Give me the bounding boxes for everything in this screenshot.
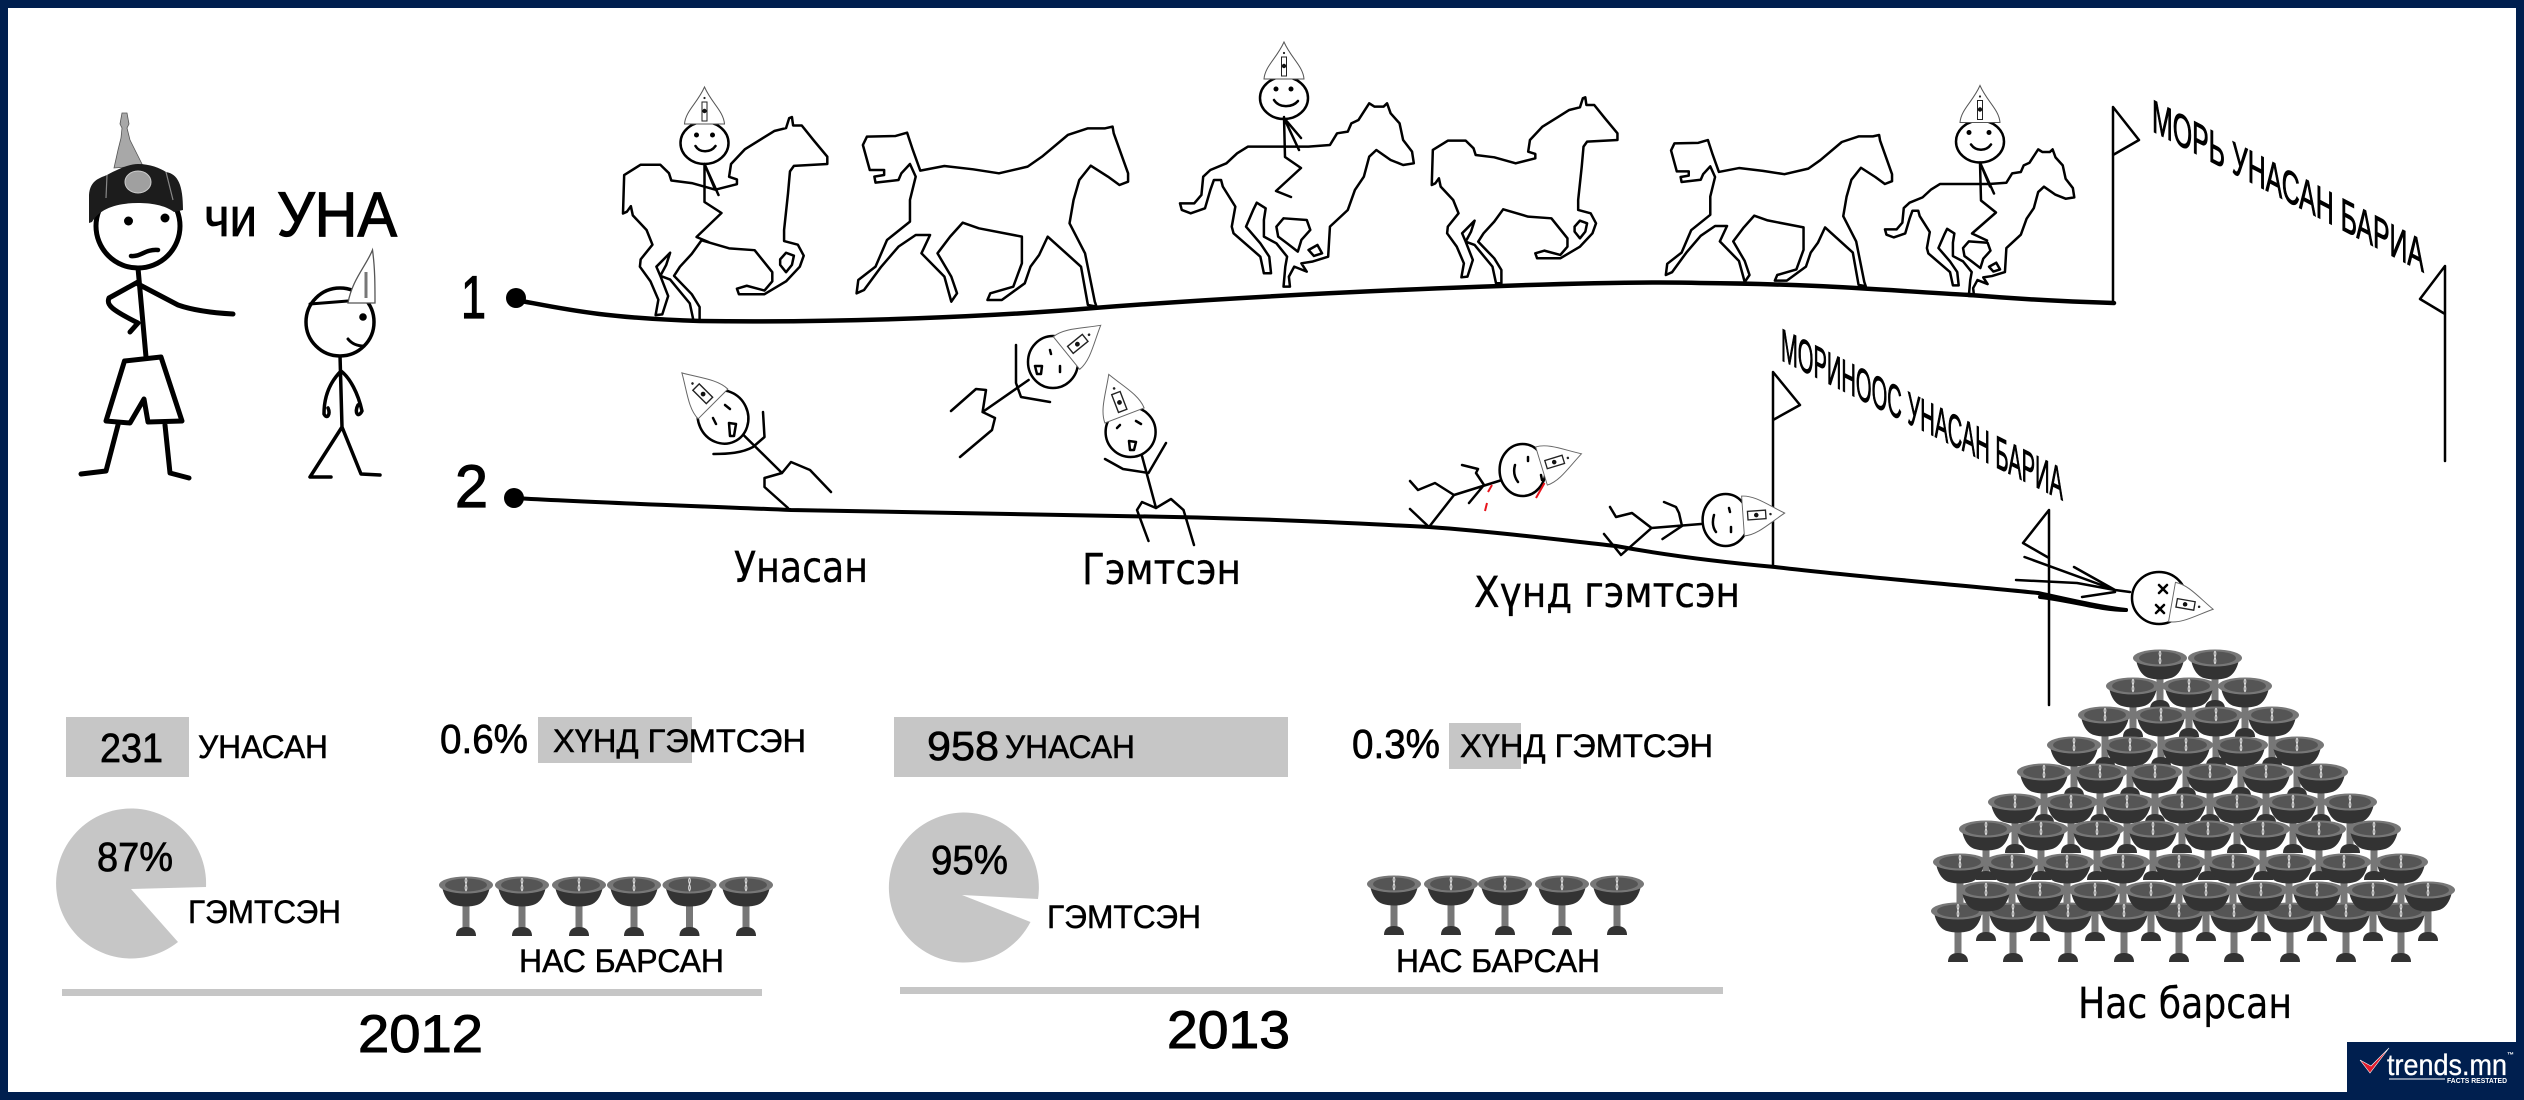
horse 4: [1432, 97, 1617, 283]
horse 5: [1666, 135, 1892, 286]
finish flag 2 right: [2023, 510, 2049, 705]
2012 deaths: six cups: [439, 876, 773, 936]
logo: trends.mn: ™: [2507, 1052, 2514, 1059]
2013 fell label: УНАСАН: [1005, 729, 1135, 765]
finish flag 1 left: [2113, 107, 2139, 303]
falling rider in the air: [951, 309, 1114, 457]
text: МОРИНООС УНАСАН БАРИА: [1781, 319, 2063, 511]
2012 injured pie: [56, 808, 206, 958]
heading: чи УНА: УНА: [277, 180, 397, 250]
logo: trends.mn: FACTS RESTATED: [2447, 1076, 2508, 1085]
finish flag 2 left: [1773, 372, 1800, 566]
horse 2: [857, 127, 1128, 307]
label: Нас барсан: Нас барсан: [2078, 979, 2292, 1029]
heading: чи УНА: [204, 180, 397, 250]
big stick man with hat: [81, 113, 233, 478]
2013 fell bar: [894, 717, 1288, 777]
2012 deaths label: НАС БАРСАН: [519, 943, 724, 979]
2012 severe injury label: ХҮНД ГЭМТСЭН: [553, 723, 806, 759]
heading: чи УНА: чи: [204, 186, 257, 248]
2012 fell label: УНАСАН: [198, 729, 328, 765]
2012 year label: 2012: [358, 1005, 483, 1064]
2013 severe injury percent: 0.3%: [1352, 721, 1440, 767]
label: Гэмтсэн: Гэмтсэн: [1082, 545, 1241, 595]
horse with rider 2: [1180, 42, 1414, 287]
2013 rule: [900, 987, 1723, 994]
2012 severe injury bar: [538, 717, 692, 763]
horse with rider 3: [1885, 86, 2074, 296]
2012 injured label: ГЭМТСЭН: [188, 894, 341, 930]
small stick man: [306, 250, 380, 477]
2013 severe injury label: ХҮНД ГЭМТСЭН: [1460, 728, 1713, 764]
fatally injured rider: [2016, 557, 2217, 629]
2013 year label: 2013: [1167, 1001, 1290, 1060]
severely injured rider 2: [1604, 493, 1786, 555]
finish flag 1 right: [2420, 266, 2445, 461]
label: Унасан: Унасан: [734, 543, 868, 593]
panel: 2013 statistics: [889, 717, 1723, 1060]
number 2: 2: [455, 453, 488, 520]
logo: trends.mn: trends.mn: [2387, 1049, 2507, 1082]
2013 fell count: 958: [927, 723, 999, 769]
logo: trends.mn: [2347, 1042, 2524, 1096]
number 1: 1: [461, 264, 486, 331]
2013 severe injury bar: [1449, 723, 1521, 769]
track 1: rode to the finish: [506, 283, 2114, 321]
2012 fell count: 231: [100, 725, 163, 771]
horse with rider 1: [623, 87, 827, 322]
severely injured rider 1: [1410, 435, 1587, 527]
2012 severe injury percent: 0.6%: [440, 716, 528, 762]
pyramid of cups: total deaths: [1931, 650, 2455, 962]
2013 injured pie: [889, 813, 1039, 963]
falling rider: Гэмтсэн: [1089, 367, 1194, 545]
2012 rule: [62, 989, 762, 996]
panel: 2012 statistics: [56, 716, 806, 1064]
2012 injured percent: 87%: [97, 834, 173, 880]
2013 injured label: ГЭМТСЭН: [1047, 899, 1201, 935]
label: Хүнд гэмтсэн: Хүнд гэмтсэн: [1474, 568, 1740, 618]
falling rider: Унасан: [667, 358, 831, 508]
2013 deaths: five cups: [1367, 876, 1644, 935]
2012 fell bar: [66, 717, 189, 777]
2013 deaths label: НАС БАРСАН: [1396, 943, 1600, 979]
2013 injured percent: 95%: [931, 837, 1008, 883]
track 2: fell from the horse: [504, 488, 2126, 610]
